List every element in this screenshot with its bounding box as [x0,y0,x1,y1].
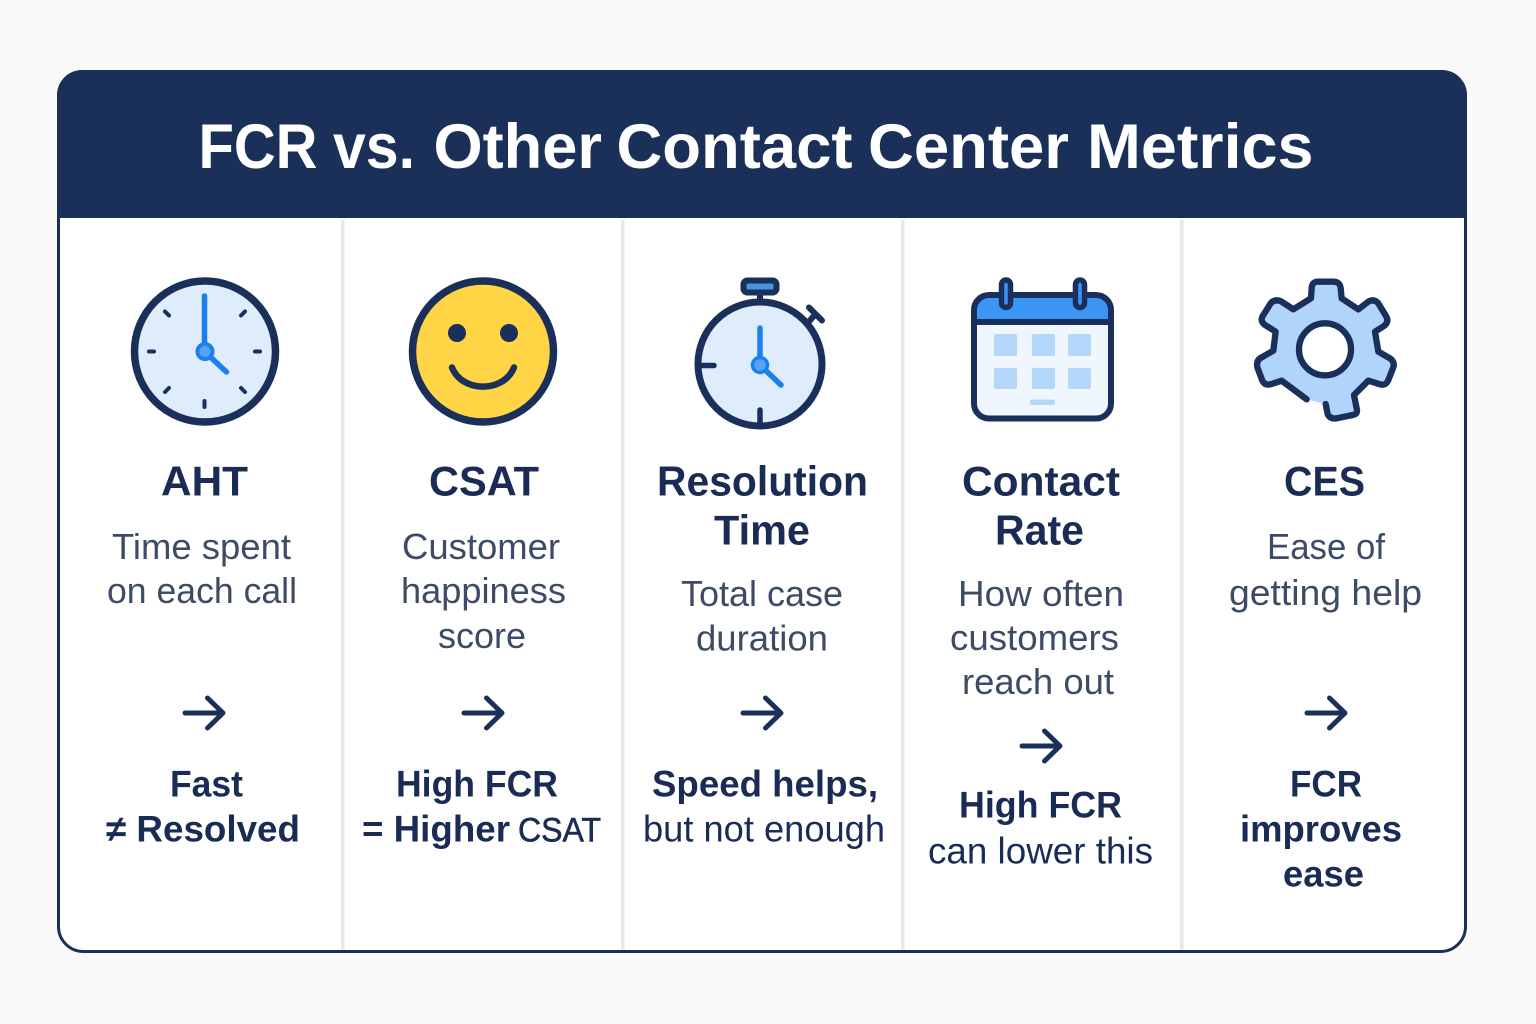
heading: CSAT: CSAT [429,458,539,504]
description: CES [1229,526,1422,613]
description: CSAT [401,526,566,656]
takeaway: CES [1240,764,1402,894]
title: Contact [616,112,853,182]
card panel [58,72,1466,952]
takeaway: CSAT: High FCR [396,764,558,804]
description: Contact Rate: customers [950,617,1119,658]
heading: Contact Rate: Contact [962,458,1120,504]
description: Contact Rate: How often [958,573,1124,614]
description: AHT [107,526,297,611]
title: Center [868,112,1069,182]
title: vs. [333,112,415,182]
takeaway: Resolution Time [643,764,885,850]
header band [57,70,1467,218]
arrow: Contact Rate [1022,731,1060,761]
takeaway: CSAT: = Higher [362,808,510,850]
icon: gear [1257,282,1394,418]
icon: calendar [974,280,1111,418]
arrow: CES [1307,698,1345,728]
heading: Resolution Time [657,458,868,554]
description: Contact Rate: reach out [962,661,1114,702]
panel: Resolution Time [643,280,885,850]
description: CES: Ease of [1267,526,1386,567]
heading: CES: CES [1284,458,1365,504]
title: Other [434,112,602,182]
description: CSAT: Customer [402,526,560,567]
heading: AHT: AHT [161,458,248,504]
description: Resolution Time: Total case [681,573,843,614]
description: AHT: on each call [107,570,297,611]
icon: smiley face [412,281,554,422]
description: AHT: Time spent [112,526,291,567]
takeaway: CES: FCR [1290,764,1362,804]
panel: AHT [106,281,300,850]
panel: CSAT [362,281,601,850]
takeaway: Contact Rate [928,784,1153,872]
arrow: Resolution Time [743,698,781,728]
takeaway: CES: ease [1283,854,1364,894]
takeaway: CSAT: CSAT [518,812,601,850]
takeaway: Resolution Time: but not enough [643,808,885,850]
heading: Resolution Time: Time [714,506,810,554]
arrow: CSAT [464,698,502,728]
heading: Resolution Time: Resolution [657,458,868,504]
description: CSAT: happiness [401,570,566,611]
takeaway: Resolution Time: Speed helps, [652,764,878,804]
description: Resolution Time: duration [696,618,828,658]
takeaway: AHT: Fast [170,764,243,804]
description: CSAT: score [438,615,526,656]
takeaway: AHT: ≠ Resolved [106,808,300,850]
title [198,112,1314,182]
takeaway: AHT [106,764,300,850]
takeaway: CSAT [362,764,601,850]
description: Resolution Time [681,573,843,658]
takeaway: CES: improves [1240,808,1402,850]
icon: stopwatch [698,280,822,426]
panel: Contact Rate [928,280,1153,872]
arrow: AHT [185,698,223,728]
icon: clock [134,281,276,422]
title: Metrics [1087,112,1314,182]
takeaway: Contact Rate: can lower this [928,830,1153,872]
panel: CES [1229,282,1422,894]
heading: Contact Rate: Rate [995,506,1084,554]
heading: Contact Rate [962,458,1120,554]
takeaway: Contact Rate: High FCR [959,784,1122,826]
title: FCR [198,112,318,182]
description: Contact Rate [950,573,1124,702]
description: CES: getting help [1229,572,1422,613]
